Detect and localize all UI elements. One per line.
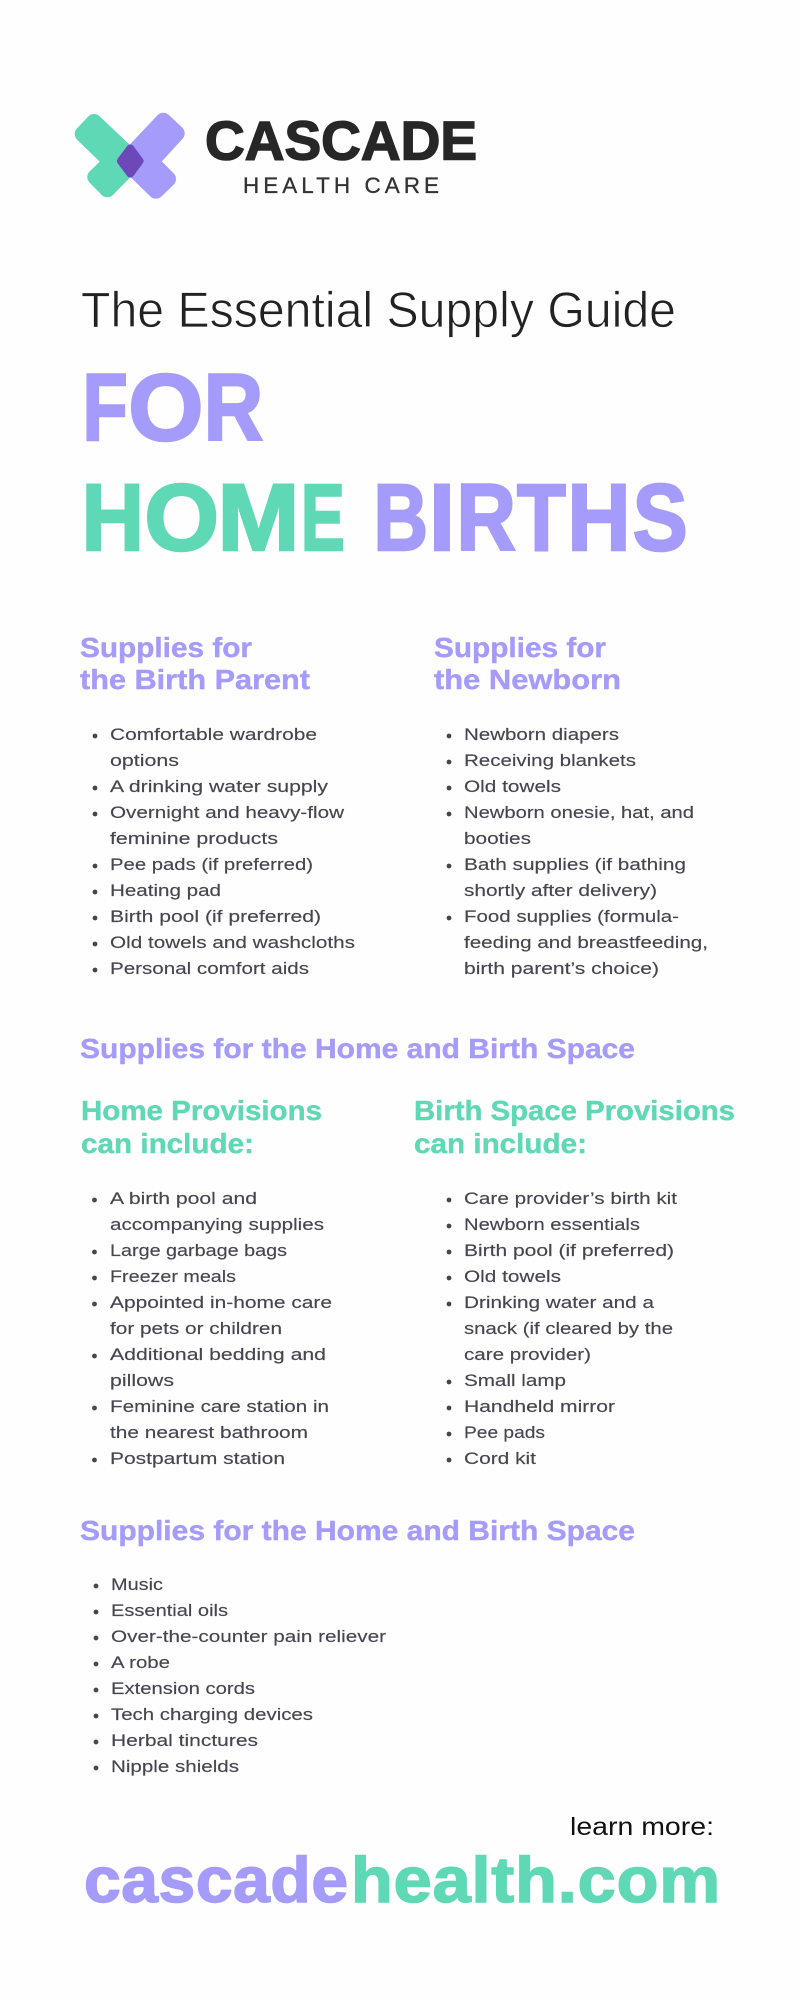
list: additional supplies: Over-the-counter pain reliever (111, 1627, 387, 1646)
heading: newborn: Supplies for (434, 632, 606, 663)
website url: health.com (351, 1845, 720, 1916)
list: additional supplies: Music (111, 1575, 163, 1594)
list: birth parent supplies: feminine products (110, 829, 278, 848)
logo subtitle: HEALTH CARE (243, 173, 439, 198)
list: home provisions: accompanying supplies (110, 1215, 324, 1234)
list: birth space provisions: Small lamp (464, 1371, 566, 1390)
list: birth parent supplies: Old towels and washcloths (110, 933, 355, 952)
list: additional supplies: A robe (111, 1653, 170, 1672)
title word: BIRTHS: H (567, 465, 631, 571)
logo: Cascade Health Care (83, 109, 477, 198)
list: newborn supplies: booties (464, 829, 531, 848)
title word: HOME: H (82, 465, 144, 571)
list: birth parent supplies: Overnight and heavy-flow (110, 803, 345, 822)
list: additional supplies: Tech charging devices (111, 1705, 313, 1724)
list: home provisions: Freezer meals (110, 1267, 236, 1286)
heading: birth space provisions: Birth Space Provisions (414, 1095, 735, 1126)
list: birth space provisions: Old towels (464, 1267, 561, 1286)
text: learn more: learn more: (570, 1813, 714, 1841)
panel: supplies for the newborn (434, 632, 708, 978)
list: birth parent supplies (93, 725, 355, 978)
list: home provisions: Appointed in-home care (110, 1293, 332, 1312)
list: birth parent supplies: Personal comfort aids (110, 959, 309, 978)
list: home provisions: Additional bedding and (110, 1345, 326, 1364)
list: birth space provisions: snack (if cleared by the (464, 1319, 673, 1338)
list: birth parent supplies: Pee pads (if preferred) (110, 855, 313, 874)
list: home provisions: pillows (110, 1371, 174, 1390)
panel: supplies for the birth parent (80, 632, 355, 978)
list: birth parent supplies: Birth pool (if preferred) (110, 907, 321, 926)
list: home provisions: Postpartum station (110, 1449, 285, 1468)
heading: supplies for the home and birth space: Supplies for the Home and Birth Space (80, 1033, 635, 1064)
list: home provisions (92, 1189, 332, 1468)
title word: FOR: R (204, 355, 263, 461)
title word: FOR: O (128, 355, 204, 461)
list: birth space provisions: care provider) (464, 1345, 591, 1364)
list: birth space provisions: Birth pool (if preferred) (464, 1241, 674, 1260)
list: birth parent supplies: A drinking water supply (110, 777, 329, 796)
heading: home provisions: Home Provisions (81, 1095, 322, 1126)
heading: birth space provisions: can include: (414, 1128, 587, 1159)
panel: additional supplies (80, 1515, 635, 1776)
list: birth space provisions (447, 1189, 677, 1468)
title word: HOME: E (301, 465, 345, 571)
title word: BIRTHS: B (374, 465, 428, 571)
heading: newborn: the Newborn (434, 664, 621, 695)
list: newborn supplies: Receiving blankets (464, 751, 636, 770)
panel: birth space provisions (414, 1095, 735, 1468)
list: birth space provisions: Pee pads (464, 1423, 545, 1442)
title word: BIRTHS: S (633, 465, 688, 571)
icon: crossed bandage mark (83, 121, 177, 191)
title line: The Essential Supply Guide: The Essential Supply Guide (81, 282, 676, 338)
panel: home provisions (81, 1095, 332, 1468)
title (81, 282, 688, 571)
list: newborn supplies: Bath supplies (if bathing (464, 855, 686, 874)
title word: FOR: F (82, 355, 128, 461)
list: additional supplies: Extension cords (111, 1679, 255, 1698)
list: home provisions: for pets or children (110, 1319, 282, 1338)
list: home provisions: A birth pool and (110, 1189, 257, 1208)
footer call to action (84, 1813, 720, 1916)
title word: BIRTHS: I (429, 465, 455, 571)
list: newborn supplies: shortly after delivery) (464, 881, 657, 900)
list: home provisions: Large garbage bags (110, 1241, 287, 1260)
list: birth parent supplies: Comfortable wardrobe (110, 725, 317, 744)
heading: birth parent: the Birth Parent (80, 664, 310, 695)
logo wordmark: CASCADE (205, 109, 477, 171)
list: birth space provisions: Handheld mirror (464, 1397, 616, 1416)
list: birth parent supplies: options (110, 751, 179, 770)
website url (84, 1844, 720, 1916)
heading: supplies for the home and birth space (repeat): Supplies for the Home and Birth Space (80, 1515, 635, 1546)
list: birth space provisions: Drinking water and a (464, 1293, 655, 1312)
heading: home provisions: can include: (81, 1128, 254, 1159)
heading: birth parent: Supplies for (80, 632, 252, 663)
title word: BIRTHS: T (517, 465, 566, 571)
title word: HOME: O (144, 465, 219, 571)
list: newborn supplies: Old towels (464, 777, 561, 796)
list: newborn supplies: birth parent’s choice) (464, 959, 659, 978)
list: additional supplies: Essential oils (111, 1601, 228, 1620)
list: birth space provisions: Care provider’s birth kit (464, 1189, 677, 1208)
list: additional supplies: Nipple shields (111, 1757, 239, 1776)
list: home provisions: Feminine care station in (110, 1397, 329, 1416)
list: newborn supplies: Food supplies (formula- (464, 907, 679, 926)
title word: HOME: M (218, 465, 300, 571)
list: home provisions: the nearest bathroom (110, 1423, 308, 1442)
list: birth space provisions: Cord kit (464, 1449, 536, 1468)
list: newborn supplies: Newborn onesie, hat, and (464, 803, 694, 822)
title word: BIRTHS: R (456, 465, 516, 571)
list: additional supplies: Herbal tinctures (111, 1731, 258, 1750)
list: additional supplies (94, 1575, 387, 1776)
list: newborn supplies: feeding and breastfeeding, (464, 933, 708, 952)
list: birth space provisions: Newborn essentials (464, 1215, 640, 1234)
website url: cascade (84, 1844, 348, 1916)
list: newborn supplies (447, 725, 708, 978)
list: newborn supplies: Newborn diapers (464, 725, 619, 744)
list: birth parent supplies: Heating pad (110, 881, 221, 900)
